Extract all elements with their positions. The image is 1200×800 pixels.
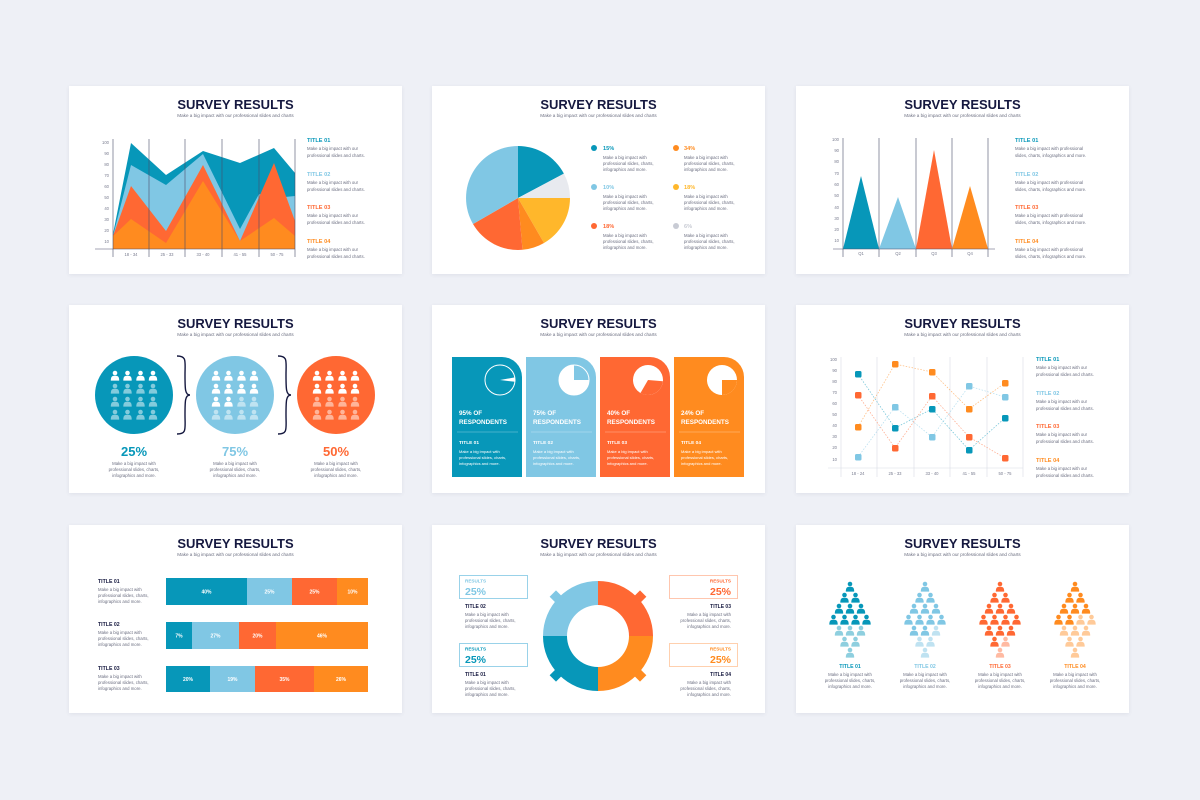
legend: TITLE 02 <box>1015 172 1038 178</box>
legend: professional slides, charts, <box>603 161 654 166</box>
area chart: 18 - 34 <box>124 252 138 257</box>
arrow 4: professional slides, charts, <box>1050 678 1100 683</box>
dot chart: 20 <box>832 445 838 450</box>
dot chart: 80 <box>832 379 838 384</box>
arrow 1: professional slides, charts, <box>825 678 875 683</box>
result box: title 03: TITLE 03 <box>710 604 731 610</box>
legend: Make a big impact with <box>684 194 728 199</box>
legend: Make a big impact with our <box>1036 432 1088 437</box>
result box: title 04: professional slides, charts, <box>680 686 731 691</box>
card 2: 75% OF <box>533 410 556 417</box>
row labels: infographics and more. <box>98 599 142 604</box>
card 4 <box>674 357 744 477</box>
circle 1: Make a big impact with <box>112 461 156 466</box>
legend: Make a big impact with professional <box>1015 247 1083 252</box>
card 4: TITLE 04 <box>681 440 701 446</box>
arrow 2: professional slides, charts, <box>900 678 950 683</box>
legend: TITLE 01 <box>307 138 330 144</box>
legend: professional slides and charts. <box>307 187 365 192</box>
legend: 15% <box>603 146 614 152</box>
legend: Make a big impact with our <box>307 213 359 218</box>
legend: professional slides and charts. <box>1036 406 1094 411</box>
legend: TITLE 02 <box>1036 391 1059 397</box>
result box: title 02: professional slides, charts, <box>465 618 516 623</box>
legend: TITLE 03 <box>307 205 330 211</box>
result box: title 02 <box>460 576 528 629</box>
circle 2: infographics and more. <box>213 473 257 478</box>
card 4: professional slides, charts, <box>681 455 728 460</box>
arrow 4: TITLE 04 <box>1064 664 1086 670</box>
bars: 27% <box>210 634 221 640</box>
arrow 1: Make a big impact with <box>828 672 872 677</box>
area chart: 41 - 55 <box>233 252 247 257</box>
legend: TITLE 02 <box>307 172 330 178</box>
card 2: infographics and more. <box>533 461 574 466</box>
row labels: infographics and more. <box>98 686 142 691</box>
result box: title 04: 25% <box>710 654 732 666</box>
triangle chart: 60 <box>834 182 840 187</box>
title: Make a big impact with our professional slides and charts <box>177 113 294 118</box>
row labels: TITLE 01 <box>98 579 120 585</box>
legend: Make a big impact with our <box>307 180 359 185</box>
area chart: 33 - 40 <box>196 252 210 257</box>
slide 8: donut <box>432 525 765 713</box>
triangle chart: 10 <box>834 238 840 243</box>
arrow 3 <box>975 582 1025 689</box>
legend: Make a big impact with our <box>307 146 359 151</box>
title: SURVEY RESULTS <box>904 536 1021 551</box>
card 3 <box>600 357 670 477</box>
legend: TITLE 03 <box>1015 205 1038 211</box>
legend: TITLE 04 <box>307 239 331 245</box>
legend: TITLE 01 <box>1015 138 1038 144</box>
result box: title 03: professional slides, charts, <box>680 618 731 623</box>
area chart: 20 <box>104 228 110 233</box>
dot chart: 10 <box>832 457 838 462</box>
dot chart: 60 <box>832 401 838 406</box>
dot chart: 41 - 55 <box>962 471 976 476</box>
legend: professional slides and charts. <box>1036 372 1094 377</box>
slide 2: pie chart <box>432 86 765 274</box>
circle 3: infographics and more. <box>314 473 358 478</box>
slide 3: triangle chart <box>796 86 1129 274</box>
bars: 46% <box>317 634 328 640</box>
result box: title 04 <box>670 644 738 697</box>
slide 4: people circles <box>69 305 402 493</box>
circle 1: professional slides, charts, <box>109 467 159 472</box>
title: SURVEY RESULTS <box>540 316 657 331</box>
card 1: 95% OF <box>459 410 482 417</box>
triangle chart: Q3 <box>931 251 937 256</box>
bars: 25% <box>309 590 320 596</box>
triangle chart: 90 <box>834 148 840 153</box>
legend <box>307 138 365 259</box>
card 4: 24% OF <box>681 410 704 417</box>
title: Make a big impact with our professional slides and charts <box>540 113 657 118</box>
arrow 2 <box>900 582 950 689</box>
bars: 10% <box>347 590 358 596</box>
legend: Make a big impact with <box>603 233 647 238</box>
area chart: 50 <box>104 195 110 200</box>
title: SURVEY RESULTS <box>540 536 657 551</box>
arrow 1: infographics and more. <box>828 684 872 689</box>
row labels: professional slides, charts, <box>98 593 149 598</box>
legend: professional slides, charts, <box>684 239 735 244</box>
triangle chart: 30 <box>834 216 840 221</box>
dot chart: 50 <box>832 412 838 417</box>
donut chart <box>543 581 653 691</box>
row labels: Make a big impact with <box>98 630 142 635</box>
legend: slides, charts, infographics and more. <box>1015 220 1086 225</box>
slide 5: respondent cards <box>432 305 765 493</box>
legend <box>1036 357 1094 478</box>
legend: Make a big impact with <box>684 233 728 238</box>
legend: slides, charts, infographics and more. <box>1015 254 1086 259</box>
bars: 7% <box>175 634 183 640</box>
card 1 <box>452 357 522 477</box>
slide 6: dot plot <box>796 305 1129 493</box>
row labels: professional slides, charts, <box>98 636 149 641</box>
row labels: infographics and more. <box>98 642 142 647</box>
result box: title 02: RESULTS <box>465 578 486 584</box>
legend: Make a big impact with <box>684 155 728 160</box>
dot chart: 25 - 33 <box>888 471 902 476</box>
legend: 18% <box>684 185 695 191</box>
result box: title 02: 25% <box>465 586 487 598</box>
arrow 4: infographics and more. <box>1053 684 1097 689</box>
result box: title 03: infographics and more. <box>687 624 731 629</box>
dot chart: 33 - 40 <box>925 471 939 476</box>
legend: infographics and more. <box>603 167 647 172</box>
circle 1: 25% <box>121 444 147 459</box>
area chart: 80 <box>104 162 110 167</box>
circle 1 <box>95 356 173 478</box>
triangle chart: 20 <box>834 227 840 232</box>
legend: infographics and more. <box>603 206 647 211</box>
result box: title 01: Make a big impact with <box>465 680 509 685</box>
legend: professional slides and charts. <box>1036 439 1094 444</box>
dot chart: 40 <box>832 423 838 428</box>
result box: title 01: professional slides, charts, <box>465 686 516 691</box>
legend: 18% <box>603 224 614 230</box>
bars: 26% <box>336 677 347 683</box>
circle 2: professional slides, charts, <box>210 467 260 472</box>
card 4: Make a big impact with <box>681 449 722 454</box>
card 3: TITLE 03 <box>607 440 627 446</box>
slide 1: area chart <box>69 86 402 274</box>
arrow 4: Make a big impact with <box>1053 672 1097 677</box>
legend: Make a big impact with our <box>1036 466 1088 471</box>
area chart: 50 - 75 <box>270 252 284 257</box>
dot chart: 50 - 75 <box>998 471 1012 476</box>
legend: infographics and more. <box>684 245 728 250</box>
dot chart: 30 <box>832 434 838 439</box>
brace 1 <box>177 356 190 434</box>
bars: 19% <box>227 677 238 683</box>
legend <box>1015 138 1086 259</box>
legend: slides, charts, infographics and more. <box>1015 187 1086 192</box>
legend: Make a big impact with professional <box>1015 180 1083 185</box>
title: SURVEY RESULTS <box>177 97 294 112</box>
legend: infographics and more. <box>603 245 647 250</box>
legend: professional slides and charts. <box>307 254 365 259</box>
bars: 35% <box>279 677 290 683</box>
legend: infographics and more. <box>684 167 728 172</box>
row labels: professional slides, charts, <box>98 680 149 685</box>
dot chart: 100 <box>830 357 838 362</box>
title: SURVEY RESULTS <box>904 97 1021 112</box>
legend: 34% <box>684 146 695 152</box>
legend: Make a big impact with our <box>1036 399 1088 404</box>
arrow 4 <box>1050 582 1100 689</box>
legend: Make a big impact with <box>603 155 647 160</box>
area chart: 90 <box>104 151 110 156</box>
triangle chart: 50 <box>834 193 840 198</box>
legend: professional slides, charts, <box>603 239 654 244</box>
title: SURVEY RESULTS <box>904 316 1021 331</box>
result box: title 03 <box>670 576 738 629</box>
area chart: 30 <box>104 217 110 222</box>
legend: infographics and more. <box>684 206 728 211</box>
bars: 40% <box>201 590 212 596</box>
result box: title 04: infographics and more. <box>687 692 731 697</box>
card 2: Make a big impact with <box>533 449 574 454</box>
arrow 2: TITLE 02 <box>914 664 936 670</box>
bars: 25% <box>264 590 275 596</box>
title: SURVEY RESULTS <box>540 97 657 112</box>
circle 3: professional slides, charts, <box>311 467 361 472</box>
circle 3: Make a big impact with <box>314 461 358 466</box>
triangle chart: Q1 <box>858 251 864 256</box>
result box: title 02: Make a big impact with <box>465 612 509 617</box>
bars <box>166 578 368 692</box>
arrow 3: TITLE 03 <box>989 664 1011 670</box>
legend: TITLE 03 <box>1036 424 1059 430</box>
brace 2 <box>278 356 291 434</box>
circle 2 <box>196 356 274 478</box>
result box: title 04: TITLE 04 <box>710 672 731 678</box>
area chart: 40 <box>104 206 110 211</box>
card 3: Make a big impact with <box>607 449 648 454</box>
title: Make a big impact with our professional slides and charts <box>540 552 657 557</box>
result box: title 01: TITLE 01 <box>465 672 486 678</box>
legend: Make a big impact with professional <box>1015 213 1083 218</box>
dot chart: 18 - 24 <box>851 471 865 476</box>
legend: TITLE 04 <box>1015 239 1039 245</box>
title: Make a big impact with our professional slides and charts <box>904 552 1021 557</box>
result box: title 01: 25% <box>465 654 487 666</box>
card 2: RESPONDENTS <box>533 419 581 426</box>
triangle chart: 100 <box>832 137 840 142</box>
legend: TITLE 04 <box>1036 458 1060 464</box>
legend: professional slides, charts, <box>684 200 735 205</box>
slide 7: stacked bars <box>69 525 402 713</box>
circle 2: 75% <box>222 444 248 459</box>
triangle chart: 40 <box>834 205 840 210</box>
card 1: Make a big impact with <box>459 449 500 454</box>
area chart: 10 <box>104 239 110 244</box>
title: Make a big impact with our professional slides and charts <box>177 332 294 337</box>
legend: professional slides, charts, <box>684 161 735 166</box>
triangle chart: 80 <box>834 159 840 164</box>
result box: title 01: infographics and more. <box>465 692 509 697</box>
result box: title 01: RESULTS <box>465 646 486 652</box>
legend: Make a big impact with our <box>1036 365 1088 370</box>
card 2 <box>526 357 596 477</box>
legend: slides, charts, infographics and more. <box>1015 153 1086 158</box>
row labels: TITLE 03 <box>98 666 120 672</box>
triangle chart: 70 <box>834 171 840 176</box>
card 3: RESPONDENTS <box>607 419 655 426</box>
bars: 20% <box>183 677 194 683</box>
area chart: 70 <box>104 173 110 178</box>
dot chart: 70 <box>832 390 838 395</box>
title: Make a big impact with our professional slides and charts <box>540 332 657 337</box>
result box: title 03: 25% <box>710 586 732 598</box>
circle 3 <box>297 356 375 478</box>
circle 1: infographics and more. <box>112 473 156 478</box>
legend: Make a big impact with <box>603 194 647 199</box>
title: SURVEY RESULTS <box>177 536 294 551</box>
row labels: TITLE 02 <box>98 622 120 628</box>
card 3: professional slides, charts, <box>607 455 654 460</box>
circle 2: Make a big impact with <box>213 461 257 466</box>
legend: professional slides and charts. <box>307 153 365 158</box>
result box: title 01 <box>460 644 528 697</box>
result box: title 04: Make a big impact with <box>687 680 732 685</box>
triangle chart: Q2 <box>895 251 901 256</box>
result box: title 03: RESULTS <box>710 578 731 584</box>
legend: 6% <box>684 224 692 230</box>
dot chart: 90 <box>832 368 838 373</box>
legend <box>591 145 735 250</box>
arrow 2: infographics and more. <box>903 684 947 689</box>
card 1: TITLE 01 <box>459 440 479 446</box>
bars: 20% <box>252 634 263 640</box>
title: Make a big impact with our professional slides and charts <box>904 332 1021 337</box>
legend: professional slides and charts. <box>307 220 365 225</box>
area chart: 100 <box>102 140 110 145</box>
row labels: Make a big impact with <box>98 587 142 592</box>
pie <box>466 146 570 250</box>
legend: 10% <box>603 185 614 191</box>
legend: Make a big impact with professional <box>1015 146 1083 151</box>
legend: Make a big impact with our <box>307 247 359 252</box>
arrow 3: professional slides, charts, <box>975 678 1025 683</box>
triangle chart: Q4 <box>967 251 973 256</box>
arrow 2: Make a big impact with <box>903 672 947 677</box>
slide 9: people arrows <box>796 525 1129 713</box>
area chart <box>95 139 295 257</box>
arrow 3: infographics and more. <box>978 684 1022 689</box>
card 4: infographics and more. <box>681 461 722 466</box>
result box: title 02: TITLE 02 <box>465 604 486 610</box>
card 1: RESPONDENTS <box>459 419 507 426</box>
area chart: 25 - 33 <box>160 252 174 257</box>
triangle chart <box>832 137 995 257</box>
card 2: professional slides, charts, <box>533 455 580 460</box>
title: Make a big impact with our professional slides and charts <box>904 113 1021 118</box>
row labels: Make a big impact with <box>98 674 142 679</box>
dot chart <box>828 357 1023 477</box>
legend: TITLE 01 <box>1036 357 1059 363</box>
area chart: 60 <box>104 184 110 189</box>
card 3: infographics and more. <box>607 461 648 466</box>
title: Make a big impact with our professional slides and charts <box>177 552 294 557</box>
result box: title 02: infographics and more. <box>465 624 509 629</box>
card 1: professional slides, charts, <box>459 455 506 460</box>
arrow 3: Make a big impact with <box>978 672 1022 677</box>
card 2: TITLE 02 <box>533 440 553 446</box>
arrow 1: TITLE 01 <box>839 664 861 670</box>
legend: professional slides and charts. <box>1036 473 1094 478</box>
result box: title 04: RESULTS <box>710 646 731 652</box>
legend: professional slides, charts, <box>603 200 654 205</box>
circle 3: 50% <box>323 444 349 459</box>
title: SURVEY RESULTS <box>177 316 294 331</box>
row labels <box>98 579 149 691</box>
card 4: RESPONDENTS <box>681 419 729 426</box>
card 3: 40% OF <box>607 410 630 417</box>
card 1: infographics and more. <box>459 461 500 466</box>
arrow 1 <box>825 582 875 689</box>
result box: title 03: Make a big impact with <box>687 612 732 617</box>
